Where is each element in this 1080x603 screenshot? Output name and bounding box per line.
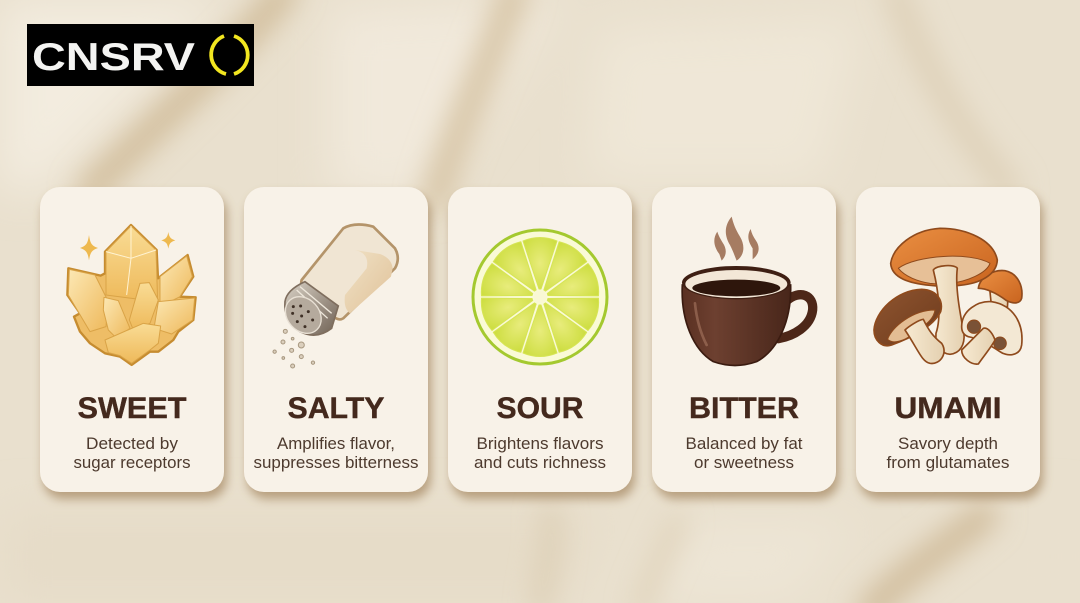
description: sweet: sugar receptors: [74, 454, 190, 472]
heading: sour: SOUR: [496, 392, 584, 425]
heading: umami: UMAMI: [894, 392, 1002, 425]
description: sour: Brightens flavors: [476, 435, 604, 453]
panel: umami: [856, 187, 1040, 492]
description: umami: [886, 435, 1010, 472]
description: salty: Amplifies flavor,: [277, 435, 395, 453]
icon: salt shaker: [273, 225, 398, 368]
icon: sugar crystals: [67, 225, 196, 365]
description: salty: [254, 435, 418, 472]
panel: sweet: [40, 187, 224, 492]
description: bitter: or sweetness: [694, 454, 794, 472]
description: sour: [474, 435, 606, 472]
logo: [27, 24, 254, 86]
icon: lime slice: [473, 230, 607, 364]
description: sweet: Detected by: [86, 435, 179, 453]
icon: coffee cup: [682, 217, 813, 365]
heading: sweet: SWEET: [78, 392, 186, 425]
description: umami: from glutamates: [886, 454, 1010, 472]
description: bitter: [686, 435, 803, 472]
heading: bitter: BITTER: [689, 392, 799, 425]
panel: salty: [244, 187, 428, 492]
description: sweet: [74, 435, 190, 472]
panel: bitter: [652, 187, 836, 492]
description: bitter: Balanced by fat: [686, 435, 803, 453]
logo: CNSRV: [32, 36, 195, 79]
description: sour: and cuts richness: [474, 454, 606, 472]
heading: salty: SALTY: [288, 392, 384, 425]
panel: sour: [448, 187, 632, 492]
card shadows: [43, 194, 1043, 499]
icon: mushrooms: [874, 228, 1022, 364]
description: salty: suppresses bitterness: [254, 454, 418, 472]
description: umami: Savory depth: [898, 435, 998, 453]
